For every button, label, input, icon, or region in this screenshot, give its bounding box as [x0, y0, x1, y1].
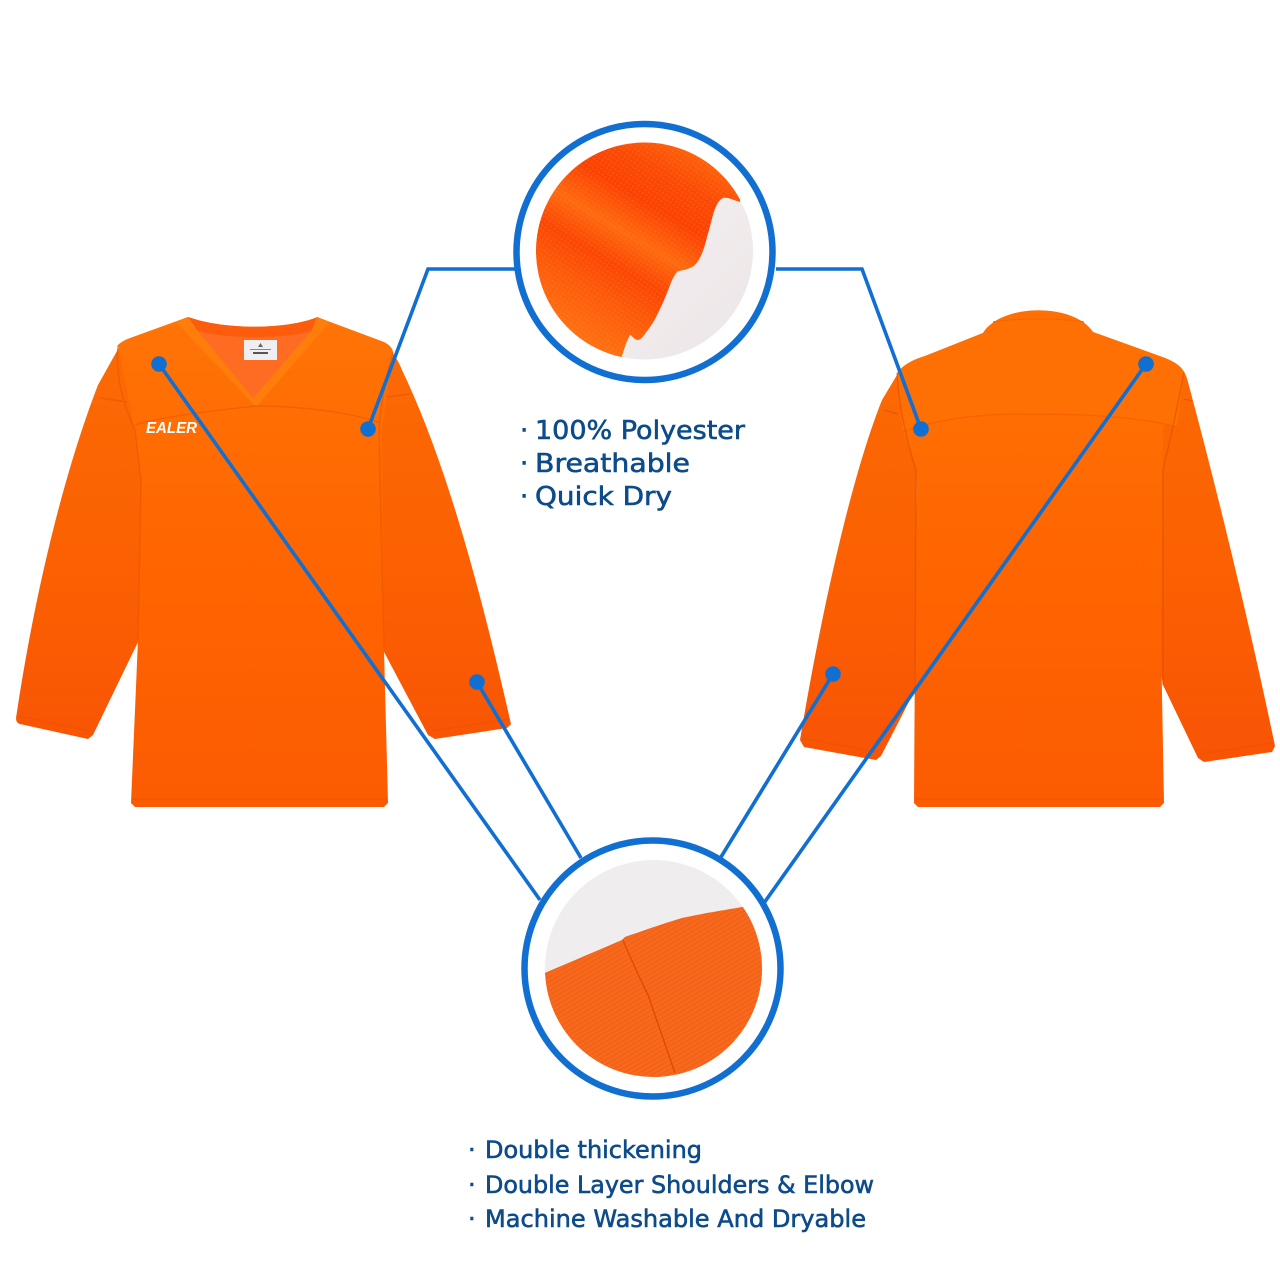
front right sleeve: [378, 348, 511, 739]
jersey: back view: [800, 310, 1275, 807]
line: back shoulder to bottom circle: [764, 364, 1146, 903]
back yoke seam: [903, 414, 1177, 432]
fabric photo: [536, 142, 753, 360]
text: bottom features: ·: [468, 1171, 476, 1199]
text: bottom features: Double Layer Shoulders & Elbow: [485, 1171, 874, 1199]
text: bottom features: ·: [468, 1136, 476, 1164]
text: bottom features: Double thickening: [485, 1136, 702, 1164]
detail circle: shoulder fabric: [524, 840, 780, 1096]
line: front chest to bottom circle: [159, 364, 540, 900]
front neck label: [244, 340, 277, 360]
back yoke: [897, 310, 1184, 432]
text: top features: ·: [520, 416, 528, 446]
logo text: EALER: [146, 420, 198, 437]
fabric seam: [623, 940, 675, 1073]
back right sleeve: [1155, 365, 1275, 762]
sleeve seams: [100, 345, 410, 650]
back neck band: [188, 317, 318, 337]
text: bottom features: ·: [468, 1205, 476, 1233]
connector lines: [159, 269, 1146, 903]
line: front sleeve to bottom circle: [477, 682, 581, 858]
front v-neck trim: [176, 317, 330, 407]
connector dots: [151, 356, 1154, 690]
front torso: [118, 317, 393, 807]
back torso: [897, 310, 1184, 807]
text: top features: [520, 416, 745, 512]
text: bottom features: [468, 1136, 874, 1233]
yoke seam: [135, 406, 380, 425]
text: top features: ·: [520, 449, 528, 479]
line: top circle to front shoulder: [368, 269, 516, 429]
front left sleeve: [16, 342, 142, 739]
text: top features: ·: [520, 482, 528, 512]
line: back sleeve to bottom circle: [721, 674, 833, 857]
back left sleeve: [800, 370, 917, 760]
text: top features: 100% Polyester: [535, 416, 745, 446]
line: top circle to back shoulder: [776, 269, 921, 429]
jersey: front view: [16, 317, 511, 807]
text: top features: Breathable: [535, 449, 690, 479]
detail circle: collar fabric: [516, 124, 772, 380]
back hems: [802, 738, 1273, 799]
back collar band: [993, 319, 1084, 322]
text: bottom features: Machine Washable And Dryable: [485, 1205, 866, 1233]
fabric photo: [540, 855, 770, 1080]
front collar inner: [182, 317, 322, 408]
hems: [18, 716, 509, 799]
back sleeve seams: [884, 372, 1192, 690]
text: top features: Quick Dry: [535, 482, 672, 512]
